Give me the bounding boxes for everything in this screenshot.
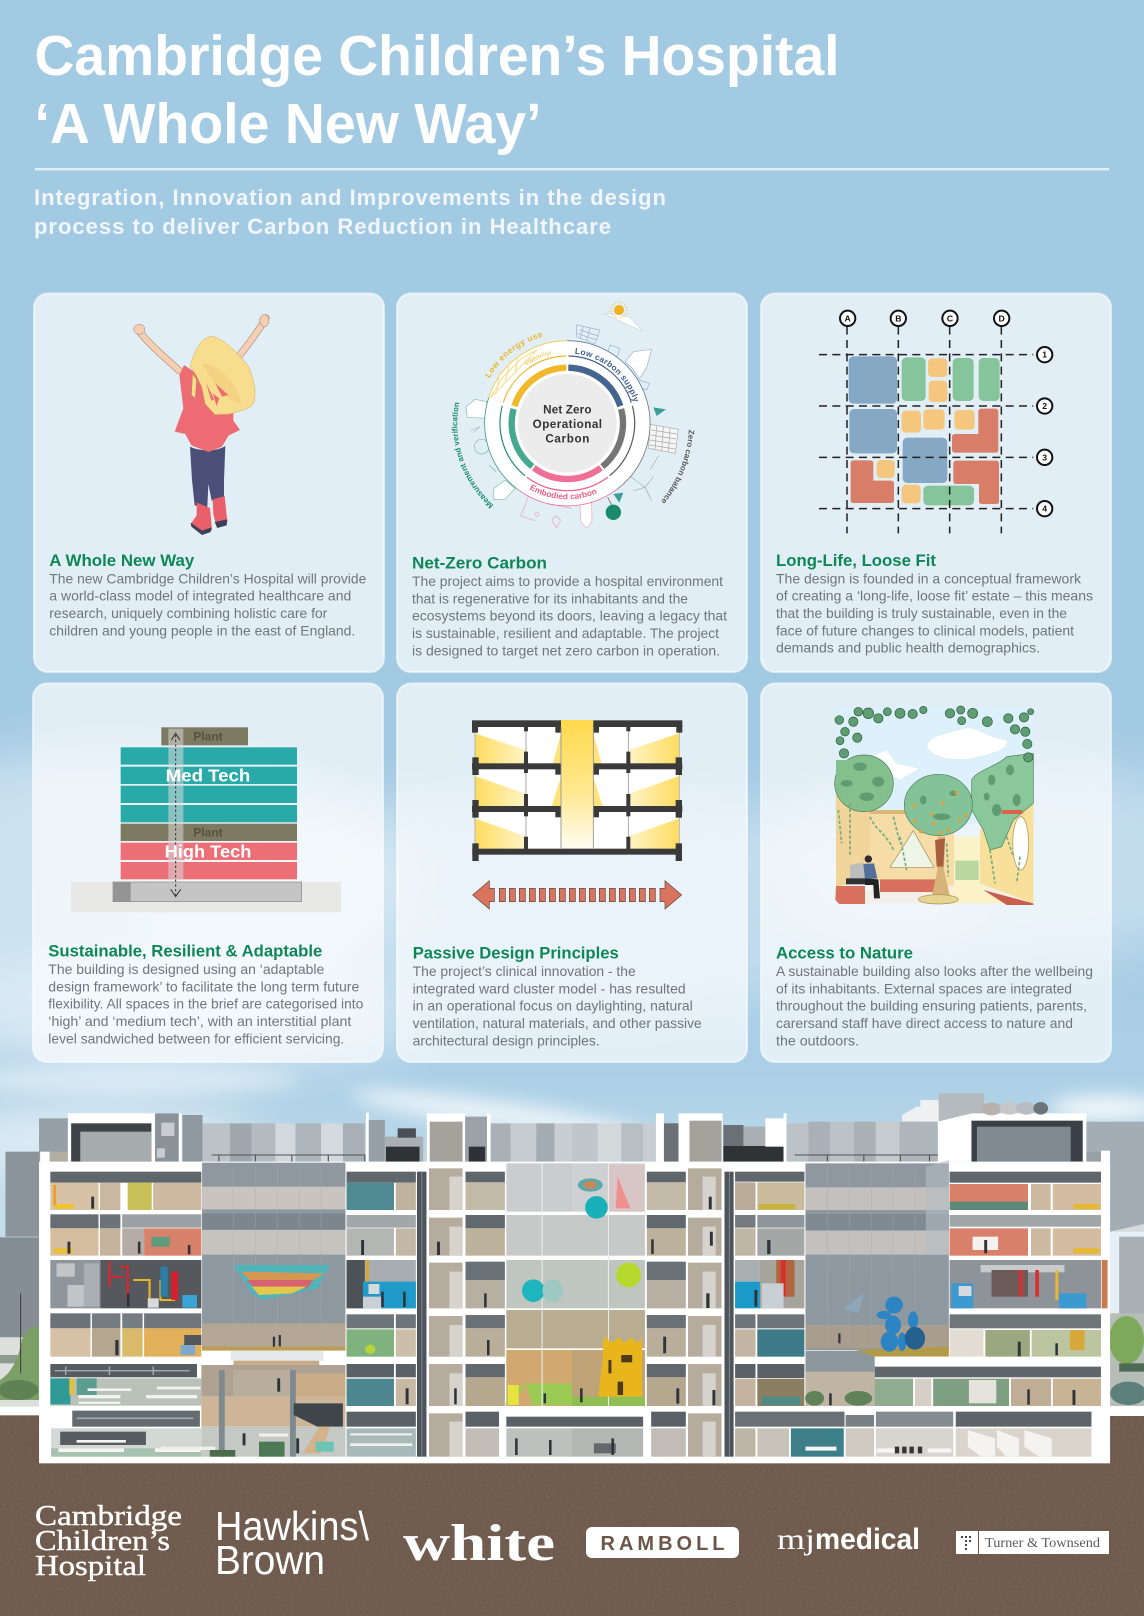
diagram: structural grid with room blocks: A xyxy=(845,313,852,323)
body text: The building is designed using an ‘adaptable xyxy=(48,962,325,977)
body text: that is regenerative for its inhabitants and the xyxy=(412,591,688,606)
body text: level sandwiched between for efficient servicing. xyxy=(48,1031,344,1046)
outer ring xyxy=(485,341,650,506)
seated people xyxy=(846,854,880,898)
body text xyxy=(413,964,702,1048)
ring labels: kWh/m²/yr xyxy=(524,351,551,366)
people xyxy=(67,1197,552,1455)
panel: Access to Nature xyxy=(761,684,1111,1062)
left wing rooms xyxy=(50,1172,201,1457)
white structure xyxy=(572,1162,1110,1463)
body text: the outdoors. xyxy=(776,1033,859,1048)
body text: of its inhabitants. External spaces are integrated xyxy=(776,981,1072,996)
logos xyxy=(35,1501,1109,1583)
stack labels: High Tech xyxy=(165,841,251,861)
rooms beside right atrium xyxy=(735,1172,804,1406)
diagram: structural grid with room blocks: B xyxy=(895,313,901,323)
stack labels: Plant xyxy=(193,826,223,839)
yellow tower xyxy=(598,1338,642,1397)
body text: research, uniquely combining holistic care for xyxy=(49,606,328,621)
logo: Ramboll xyxy=(586,1527,739,1558)
logo: Cambridge Children's Hospital: Hospital xyxy=(35,1551,146,1582)
body text xyxy=(776,964,1093,1048)
logo: Turner & Townsend: Turner & Townsend xyxy=(985,1535,1100,1550)
logo: mjmedical: mj xyxy=(777,1523,815,1556)
central atrium left xyxy=(505,1163,572,1457)
body text xyxy=(49,571,367,638)
centre label xyxy=(533,404,602,445)
body text: children and young people in the east of England. xyxy=(49,623,355,638)
lift shaft xyxy=(724,1172,734,1457)
hospital cross-section: right half xyxy=(572,1093,1144,1463)
hospital cross-section: left half xyxy=(0,1113,572,1463)
logo: White: white xyxy=(403,1515,555,1572)
lift shaft xyxy=(417,1172,426,1457)
logo: Cambridge Children's Hospital xyxy=(35,1501,182,1582)
central atrium right xyxy=(572,1163,645,1457)
heading: A Whole New Way xyxy=(49,551,195,570)
body text: design framework’ to facilitate the long term future xyxy=(48,979,360,994)
centre label: Net Zero xyxy=(543,404,591,417)
title: ‘A Whole New Way’ xyxy=(34,92,542,156)
centre label: Operational xyxy=(533,418,602,431)
body text: carersand staff have direct access to nature and xyxy=(776,1016,1073,1031)
diagram: structural grid with room blocks: 2 xyxy=(1042,401,1047,411)
ring labels: Low carbon supply xyxy=(575,348,638,401)
heading: Access to Nature xyxy=(776,944,913,963)
body text: integrated ward cluster model - has resulted xyxy=(413,981,686,996)
ring labels xyxy=(452,332,694,509)
logo: mjmedical: medical xyxy=(815,1523,920,1556)
body text: flexibility. All spaces in the brief are categorised into xyxy=(48,997,364,1012)
subtitle: Integration, Innovation and Improvements in the design xyxy=(34,185,666,210)
panel: Long-Life, Loose Fit xyxy=(761,294,1111,672)
body text: is sustainable, resilient and adaptable. The project xyxy=(412,626,719,641)
rooftop plant right xyxy=(572,1113,1110,1162)
panel: Passive Design Principles xyxy=(397,684,747,1062)
body text: The project’s clinical innovation - the xyxy=(413,964,636,979)
logo: Hawkins\Brown xyxy=(215,1503,370,1583)
thin arcs xyxy=(500,356,635,491)
body text: The new Cambridge Children’s Hospital will provide xyxy=(49,571,367,586)
rooftop ducts xyxy=(981,1102,1048,1115)
body text: in an operational focus on daylighting, natural xyxy=(413,999,693,1014)
lower atrium xyxy=(161,1351,345,1457)
right glazed atrium xyxy=(805,1160,950,1406)
diagram: structural grid with room blocks: 3 xyxy=(1042,452,1047,462)
ground: soil xyxy=(0,1415,1144,1616)
body text: a world-class model of integrated healthcare and xyxy=(49,589,351,604)
service rooms xyxy=(465,1172,505,1457)
ring labels: Embodied carbon xyxy=(530,484,597,500)
thick arcs xyxy=(512,368,623,479)
diagram: structural grid with room blocks: 1 xyxy=(1042,350,1047,360)
body text: architectural design principles. xyxy=(413,1033,600,1048)
panel: A Whole New Way xyxy=(34,294,384,672)
left glazed atrium xyxy=(202,1163,345,1351)
right wing rooms xyxy=(347,1172,416,1457)
logo: Cambridge Children's Hospital: Children’s xyxy=(35,1526,170,1557)
stack labels: Med Tech xyxy=(166,765,250,785)
body text: A sustainable building also looks after the wellbeing xyxy=(776,964,1093,979)
ring labels: Measurement and verification xyxy=(452,402,494,509)
body text xyxy=(48,962,364,1046)
service rooms xyxy=(647,1172,686,1457)
body text: demands and public health demographics. xyxy=(776,641,1040,656)
subtitle xyxy=(34,185,666,239)
title xyxy=(34,24,840,156)
logo: Ramboll: RAMBOLL xyxy=(600,1533,724,1555)
stair core xyxy=(429,1168,463,1457)
balloon dog sculpture xyxy=(877,1297,925,1352)
diagram: structural grid with room blocks: C xyxy=(947,313,954,323)
people xyxy=(580,1197,1075,1455)
body text: ‘high’ and ‘medium tech’, with an interstitial plant xyxy=(48,1014,351,1029)
chart: net zero operational carbon wheel xyxy=(452,302,694,529)
ring labels: Low energy use xyxy=(484,332,542,378)
diagram: structural grid with room blocks xyxy=(819,311,1052,533)
panel: Sustainable, Resilient & Adaptable xyxy=(33,684,383,1062)
body text: that the building is truly sustainable, even in the xyxy=(776,606,1067,621)
surroundings right xyxy=(902,1093,1144,1416)
rooftop plant xyxy=(39,1113,572,1162)
white structure xyxy=(39,1152,572,1463)
diagram: building stack xyxy=(71,727,341,912)
illustration: courtyard garden xyxy=(835,706,1034,905)
diagram: structural grid with room blocks: 4 xyxy=(1042,504,1047,514)
body text: of creating a ‘long-life, loose fit’ estate – this means xyxy=(776,589,1093,604)
body text: ventilation, natural materials, and other passive xyxy=(413,1016,702,1031)
surroundings left xyxy=(0,1152,40,1415)
surrounding line-art icons xyxy=(466,325,678,528)
right wing rooms xyxy=(735,1172,1101,1457)
net sculpture xyxy=(233,1265,330,1300)
icon: child with raised arms xyxy=(134,315,269,535)
body text: throughout the building ensuring patients, parents, xyxy=(776,999,1087,1014)
panel: Net-Zero Carbon xyxy=(396,292,748,673)
body text: face of future changes to clinical models, patient xyxy=(776,623,1074,638)
heading: Passive Design Principles xyxy=(413,944,619,963)
body text xyxy=(776,571,1093,656)
body text: The project aims to provide a hospital environment xyxy=(412,574,723,589)
body text: The design is founded in a conceptual framework xyxy=(776,571,1081,586)
body text: is designed to target net zero carbon in operation. xyxy=(412,643,720,658)
stack labels xyxy=(165,730,251,861)
logo: Hawkins\Brown: Brown xyxy=(215,1537,325,1583)
heading: Sustainable, Resilient & Adaptable xyxy=(48,942,322,961)
diagram: daylight section xyxy=(472,720,682,861)
body text xyxy=(412,574,727,658)
icon: double-headed arrow xyxy=(473,881,682,909)
subtitle: process to deliver Carbon Reduction in Healthcare xyxy=(34,214,611,239)
diagram: structural grid with room blocks: D xyxy=(999,313,1005,323)
logo: Cambridge Children's Hospital: Cambridge xyxy=(35,1501,182,1532)
stair core xyxy=(688,1168,722,1457)
body text: ecosystems beyond its doors, leaving a legacy that xyxy=(412,609,727,624)
logo: Hawkins\Brown: Hawkins\ xyxy=(215,1503,370,1549)
heading: Net-Zero Carbon xyxy=(412,554,547,573)
logo: Turner & Townsend xyxy=(956,1531,1109,1554)
icon: sun and cloud xyxy=(604,302,643,332)
stack labels: Plant xyxy=(193,730,223,743)
centre label: Carbon xyxy=(545,432,589,445)
title: Cambridge Children’s Hospital xyxy=(34,24,840,88)
ring labels: Zero carbon balance xyxy=(662,430,694,504)
grid labels xyxy=(840,311,1052,516)
heading: Long-Life, Loose Fit xyxy=(776,551,936,570)
